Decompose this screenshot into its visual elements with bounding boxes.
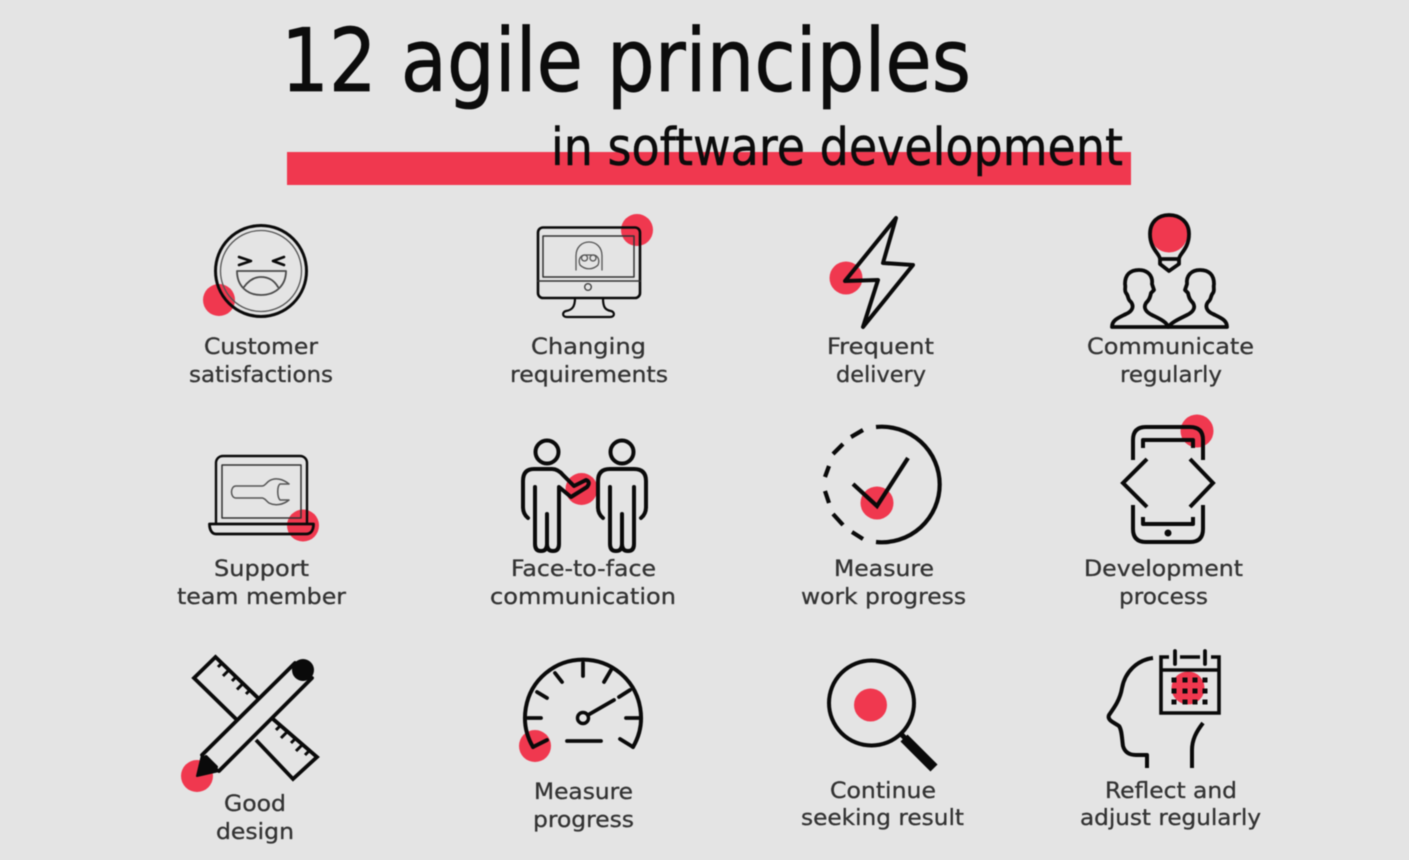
label: adjust regularly	[1080, 806, 1261, 831]
label: Face-to-face	[511, 557, 656, 582]
icon: laptop with wrench	[210, 456, 319, 542]
label: Changing	[531, 335, 646, 360]
icon: laughing face	[203, 226, 306, 316]
panel: frequent delivery	[827, 218, 934, 388]
label: Communicate	[1087, 335, 1254, 360]
label: progress	[533, 808, 634, 833]
panel: support team member	[177, 456, 347, 610]
panel: measure progress	[519, 660, 641, 833]
label: Customer	[204, 335, 319, 360]
label: process	[1119, 585, 1208, 610]
label: Measure	[834, 557, 934, 582]
label: regularly	[1120, 363, 1222, 388]
panel: communicate regularly	[1087, 215, 1254, 388]
label: communication	[490, 585, 676, 610]
label: requirements	[510, 363, 668, 388]
label: Good	[224, 792, 286, 817]
label: team member	[177, 585, 347, 610]
icon: smartphone with code brackets	[1123, 414, 1214, 542]
label: satisfactions	[189, 363, 333, 388]
panel: face-to-face communication	[490, 440, 676, 610]
label: Development	[1084, 557, 1243, 582]
label: work progress	[801, 585, 966, 610]
icon: desktop monitor	[538, 214, 653, 317]
label: Frequent	[827, 335, 934, 360]
icon: lightning bolt	[830, 218, 913, 327]
title: 12 agile principles	[281, 10, 971, 112]
icon: magnifying glass	[829, 660, 934, 768]
panel: good design	[181, 657, 317, 845]
panel: development process	[1084, 414, 1243, 610]
panel: changing requirements	[510, 214, 668, 388]
subtitle with red highlight bar: in software development	[551, 118, 1123, 178]
label: Continue	[830, 779, 936, 804]
panel: reflect and adjust regularly	[1080, 651, 1261, 831]
icon: two people shaking hands	[523, 440, 646, 551]
label: Reflect and	[1105, 779, 1237, 804]
label: Measure	[534, 780, 633, 805]
label: delivery	[836, 363, 926, 388]
icon: crossed ruler and pencil	[181, 657, 317, 792]
label: seeking result	[801, 806, 964, 831]
icon: speedometer gauge	[519, 660, 641, 762]
calendar date dots	[1172, 678, 1208, 704]
icon: dashed circle with check mark	[825, 427, 940, 542]
panel: customer satisfactions	[189, 226, 333, 388]
panel: continue seeking result	[801, 660, 964, 831]
subtitle with red highlight bar	[287, 118, 1131, 185]
label: design	[216, 820, 294, 845]
icon: head with calendar	[1109, 651, 1219, 768]
icon: two people and light bulb	[1112, 215, 1227, 327]
panel: measure work progress	[801, 427, 966, 610]
label: Support	[214, 557, 309, 582]
